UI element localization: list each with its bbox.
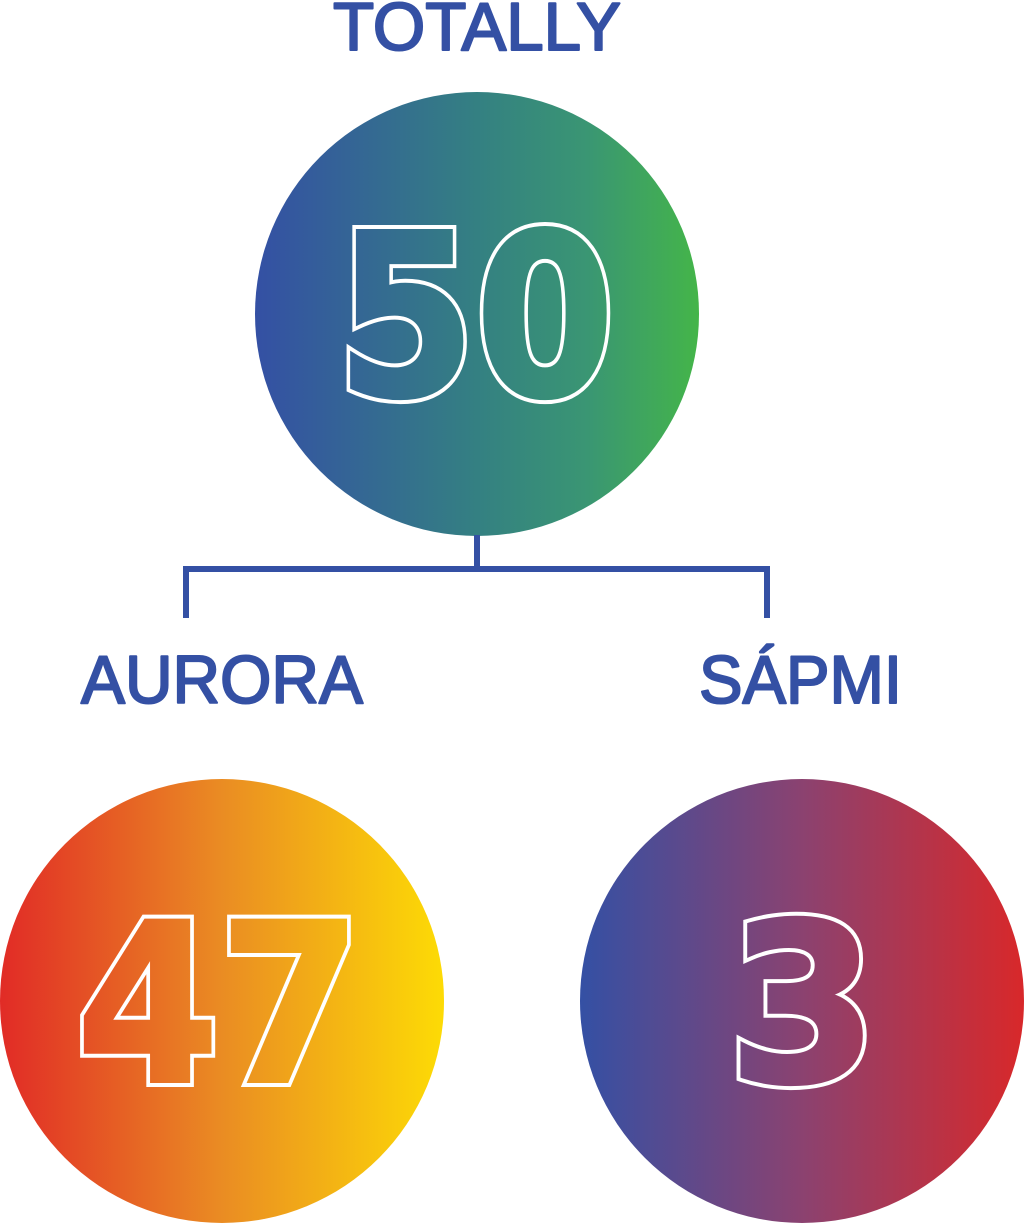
number: 47: 47 [76, 877, 362, 1133]
connector lines [186, 535, 767, 618]
circle: sapmi 3 [580, 779, 1024, 1223]
number: 47: 47 [76, 877, 362, 1133]
number: 3: 3 [728, 877, 878, 1133]
number: 50: 50 [336, 187, 614, 449]
number: 3: 3 [728, 877, 878, 1133]
heading: sapmi: SÁPMI [699, 642, 902, 718]
circle: totally 50 [255, 92, 699, 536]
heading: aurora: AURORA [81, 642, 364, 718]
circle: aurora 47 [0, 779, 444, 1223]
number: 50: 50 [336, 187, 614, 449]
